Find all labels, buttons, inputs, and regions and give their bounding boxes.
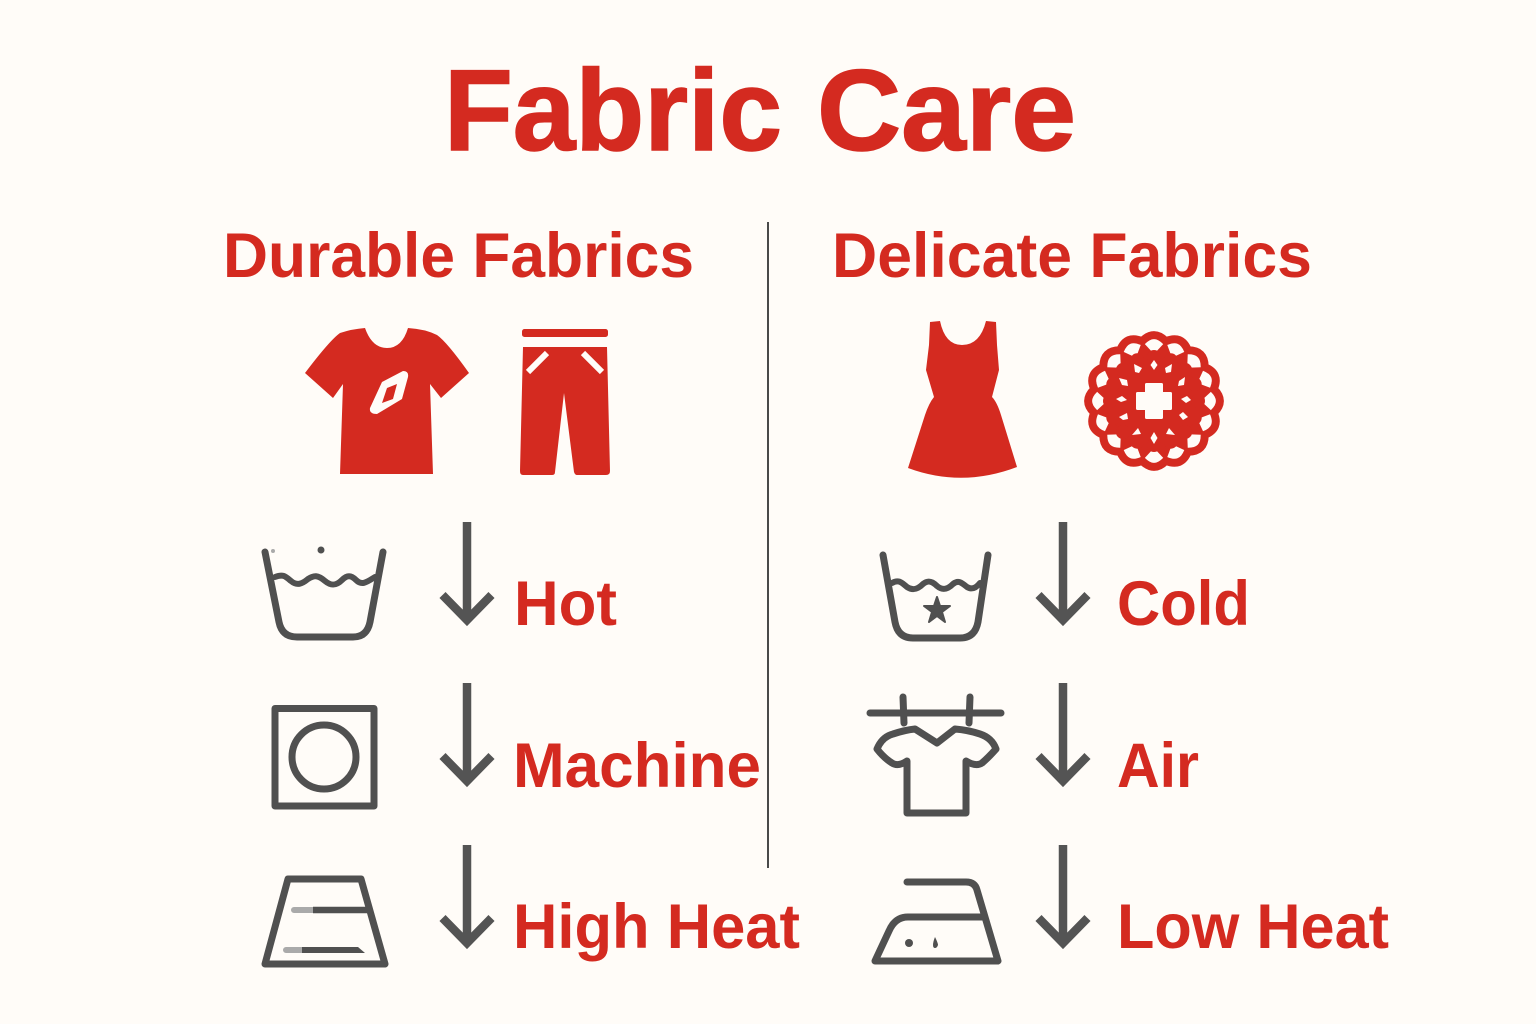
row: cold wash [883,522,1250,639]
icon: trapezoid with bars [265,879,385,964]
arrow: down [442,522,492,620]
arrow: down [442,845,492,943]
title [444,47,1076,175]
icon: trousers [520,329,610,475]
panel: delicate fabrics [832,221,1389,962]
arrow: down [1038,522,1088,620]
label: cold: Cold [1117,569,1250,639]
heading: durable fabrics: Durable Fabrics [223,221,694,291]
center divider [767,222,769,868]
icon: dress [908,321,1017,478]
arrow: down [1038,683,1088,781]
row: machine dry [275,683,761,806]
heading: delicate fabrics: Delicate Fabrics [832,221,1312,291]
label: hot: Hot [514,569,617,639]
icon: tumble dry square [275,708,374,806]
label: machine: Machine [513,731,761,801]
icon: iron [875,882,998,961]
panel: durable fabrics [223,221,800,964]
title: Fabric [444,47,782,175]
row: air dry [870,683,1199,813]
label: high heat: High Heat [513,892,800,962]
arrow: down [1038,845,1088,943]
icon: lace flower [1088,335,1220,467]
icon: wash basin with dots [265,546,383,637]
arrow: down [442,683,492,781]
title: Care [817,47,1076,175]
row: low heat [875,845,1389,962]
icon: t-shirt [305,328,469,474]
row: hot wash [265,522,617,639]
row: high heat [265,845,800,964]
icon: shirt on clothesline [870,697,1001,813]
label: air: Air [1117,731,1199,801]
label: low heat: Low Heat [1117,892,1389,962]
icon: wash basin with star [883,555,988,638]
